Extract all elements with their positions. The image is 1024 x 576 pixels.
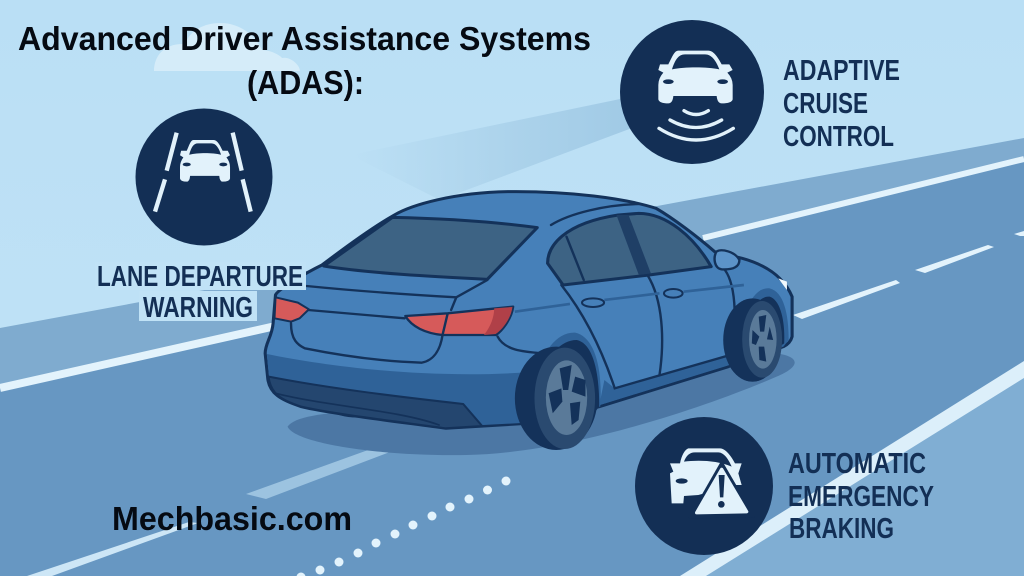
left edge line: [0, 325, 280, 388]
cloud: [154, 23, 300, 71]
rear wheel: [515, 340, 599, 450]
label: lane departure warning: [95, 261, 306, 324]
right tail light: [405, 307, 513, 335]
right road verge: [706, 378, 1024, 576]
windscreen: [672, 54, 719, 69]
underside: [329, 410, 377, 417]
icon: car front: [180, 140, 230, 182]
door handles: [582, 289, 683, 307]
label: adaptive cruise control: [783, 55, 900, 153]
lower body band: [267, 354, 599, 427]
label: lane departure warning: LANE DEPARTURE: [97, 261, 303, 293]
label: lane departure warning: WARNING: [143, 292, 253, 324]
mirror: [715, 250, 739, 269]
icon: automatic emergency braking: [635, 417, 773, 555]
front wheel arch: [737, 288, 789, 362]
headlight: [778, 278, 787, 290]
centre dash near car: [246, 427, 453, 499]
lower lane line: [27, 522, 198, 576]
title: [18, 20, 591, 101]
body crease: [515, 285, 744, 312]
car body: [265, 192, 792, 428]
label: automatic emergency braking: EMERGENCY: [788, 481, 934, 513]
road surface: [0, 159, 1024, 576]
tail light divider: [443, 313, 448, 335]
windscreen: [684, 452, 732, 467]
title: Advanced Driver Assistance Systems: [18, 20, 591, 57]
sensor beam: [350, 98, 640, 200]
car shadow: [288, 353, 795, 455]
icon: adaptive cruise control: [620, 20, 764, 164]
title: (ADAS):: [247, 64, 364, 101]
dotted path: [296, 476, 510, 576]
rear window: [324, 217, 537, 279]
icon: car front: [658, 51, 733, 103]
label: adaptive cruise control: CRUISE: [783, 88, 868, 120]
website credit: Mechbasic.com: [112, 500, 352, 537]
road shoulder: [0, 138, 1024, 576]
label: automatic emergency braking: [788, 448, 934, 545]
rocker panel: [599, 355, 740, 405]
left tail light: [274, 297, 309, 322]
exclamation mark: [719, 475, 725, 497]
right edge line: [703, 159, 1024, 238]
icon: car: [670, 448, 742, 503]
bottom right edge line: [680, 361, 1024, 576]
centre dashes right: [793, 231, 1024, 319]
front wheel: [723, 297, 784, 382]
rear wheel arch: [529, 333, 601, 423]
tail light shade: [484, 307, 512, 335]
warning triangle: [697, 469, 747, 513]
window pillar: [616, 215, 651, 275]
radar waves: [659, 111, 733, 140]
label: adaptive cruise control: CONTROL: [783, 121, 894, 153]
label: automatic emergency braking: BRAKING: [789, 513, 894, 545]
label: adaptive cruise control: ADAPTIVE: [783, 55, 900, 87]
lane markings: [155, 133, 251, 212]
headlights: [663, 79, 728, 84]
front tyre: [723, 298, 782, 382]
body lines: [275, 204, 735, 425]
lower bumper: [269, 377, 482, 428]
icon: lane departure warning: [136, 108, 272, 246]
label: automatic emergency braking: AUTOMATIC: [788, 448, 926, 480]
warning triangle gap: [688, 460, 755, 518]
car with shadow: [265, 192, 795, 455]
headlight: [676, 478, 688, 484]
side windows: [548, 213, 711, 285]
